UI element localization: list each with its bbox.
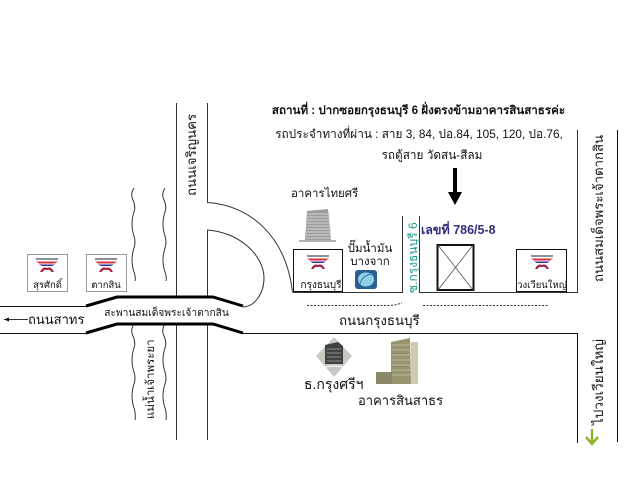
icon: Bangchak logo: [355, 270, 377, 289]
arrow to building: [448, 168, 462, 205]
station: Wongwian Yai: [516, 250, 567, 292]
road network: [0, 103, 618, 443]
label: Bangchak petrol station: บางจาก: [350, 256, 390, 268]
station: Krung Thon Buri: [294, 250, 342, 292]
label: Krungsri bank: ธ.กรุงศรีฯ: [304, 376, 364, 393]
river label: แม่น้ำเจ้าพระยา: [142, 339, 157, 419]
road label: Krungthonburi: ถนนกรุงธนบุรี: [339, 313, 420, 329]
label: Thai Sri building: อาคารไทยศรี: [291, 187, 358, 200]
house number: เลขที่ 786/5-8: [421, 221, 496, 237]
road label: Taksin: ถนนสมเด็จพระเจ้าตากสิน: [589, 135, 606, 282]
location heading: สถานที่ : ปากซอยกรุงธนบุรี 6 ฝั่งตรงข้ามอาคารสินสาธรค่ะ: [272, 101, 565, 118]
station: Taksin: ตากสิน: [91, 280, 121, 291]
label: Sin Sathorn building: อาคารสินสาธร: [358, 393, 443, 408]
bus routes: [275, 126, 563, 163]
soi label: ซ.กรุงธนบุรี 6: [406, 222, 421, 293]
icon: Krungsri bank: [316, 337, 352, 377]
label: Bangchak petrol station: [348, 239, 392, 268]
road label: Sathorn: ถนนสาทร: [28, 312, 84, 327]
station: Taksin: [86, 254, 126, 292]
icon: green arrow: [586, 429, 598, 444]
icon: Sin Sathorn building: [376, 338, 418, 384]
station: Surasak: สุรศักดิ์: [33, 277, 63, 291]
icon: Thai Sri tower: [299, 209, 336, 242]
bridge: [86, 297, 243, 333]
station: Surasak: [28, 254, 68, 292]
bridge label: สะพานสมเด็จพระเจ้าตากสิน: [104, 305, 229, 319]
bus routes: รถประจำทางที่ผ่าน : สาย 3, 84, ปอ.84, 105, 120, ปอ.76,: [275, 126, 563, 141]
building marker: [438, 245, 474, 290]
road label: to Wongwian Yai: ไปวงเวียนใหญ่: [590, 339, 606, 426]
station: Krung Thon Buri: กรุงธนบุรี: [301, 279, 342, 291]
label: Bangchak petrol station: ปั๊มน้ำมัน: [348, 239, 392, 255]
road label: Charoen Nakhon: ถนนเจริญนคร: [184, 114, 199, 196]
bus routes: รถตู้สาย วัดสน-สีลม: [382, 148, 482, 163]
station: Wongwian Yai: วงเวียนใหญ่: [517, 279, 567, 291]
